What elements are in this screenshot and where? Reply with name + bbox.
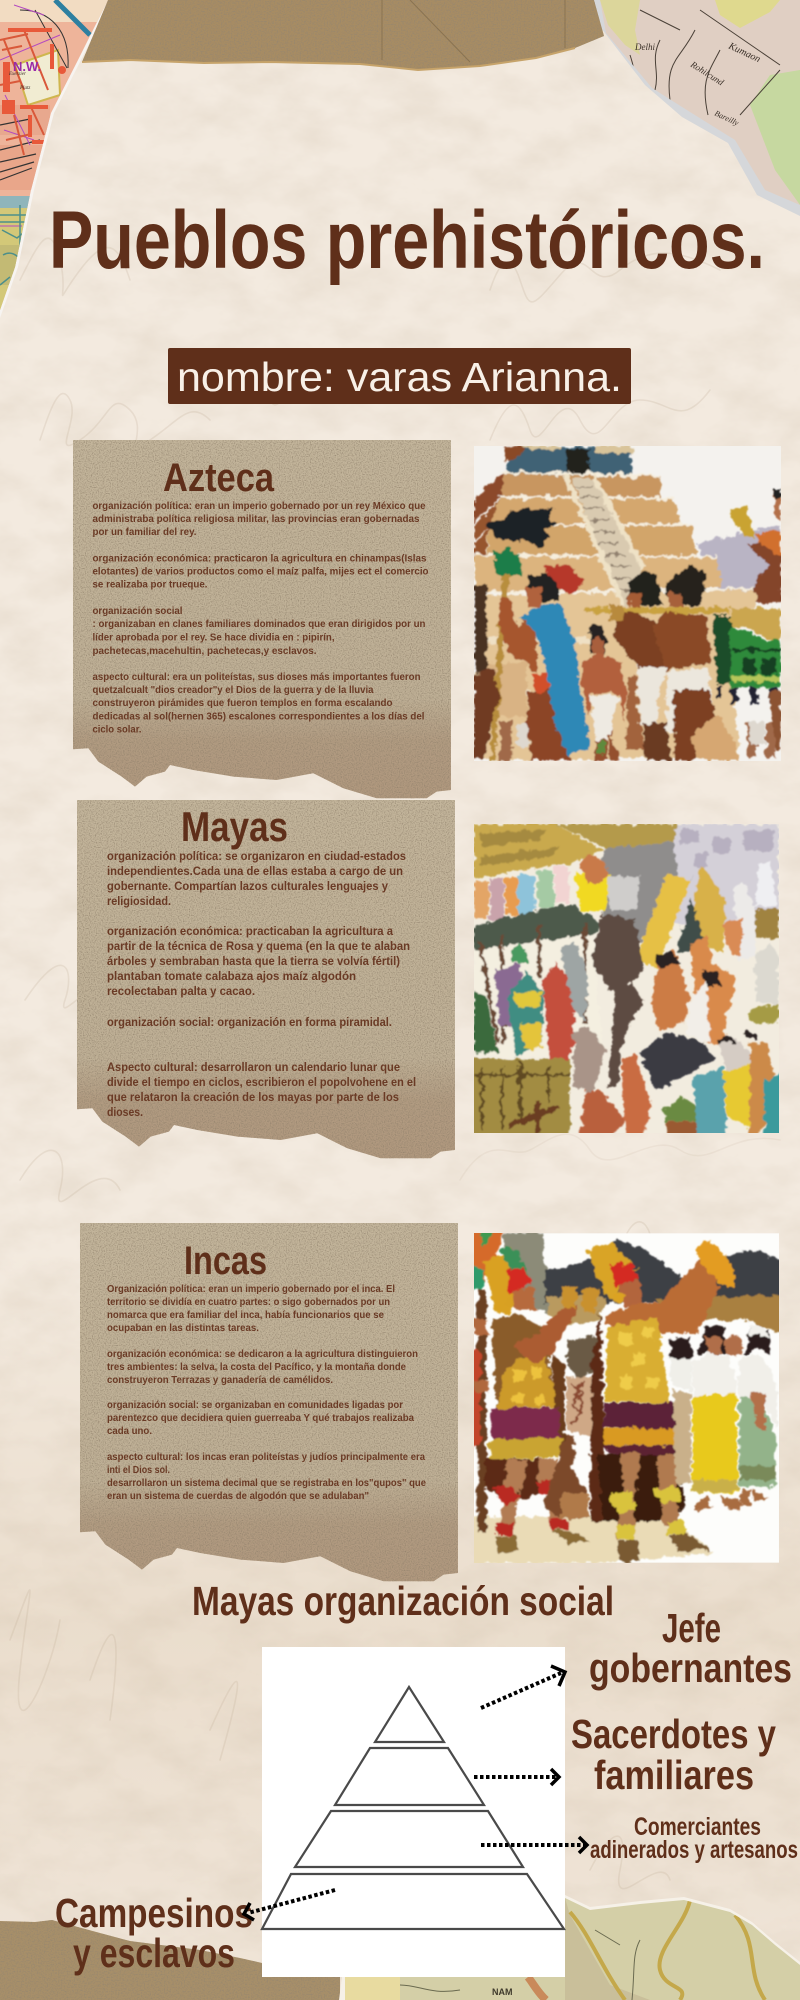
heading: azteca: Azteca: [163, 456, 275, 500]
label: sacerdotes y familiares: [571, 1711, 776, 1798]
text: azteca: [92, 501, 428, 736]
torn map: bottom right: [339, 1890, 800, 2000]
panel: azteca: [73, 440, 451, 798]
text: mayas: religiosidad.: [107, 894, 171, 908]
text: azteca: organización económica: practicaron la agricultura en chinampas(Islas: [92, 554, 427, 564]
text: incas: Organización política: eran un imperio gobernado por el inca. El: [107, 1284, 395, 1295]
arrow: to campesinos: [244, 1890, 335, 1920]
pyramid diagram: [262, 1647, 565, 1977]
panel: mayas: [77, 800, 455, 1158]
torn map: top right: Rohilcund: [688, 59, 726, 88]
text: mayas: divide el tiempo en ciclos, escribieron el popolvohene en el: [107, 1075, 416, 1089]
text: azteca: administraba política religiosa militar, las provincias eran gobernadas: [92, 514, 420, 525]
label: jefe gobernantes: [589, 1605, 792, 1691]
text: mayas: gobernante. Compartían lazos culturales lenguajes y: [107, 879, 388, 893]
label: jefe gobernantes: Jefe: [662, 1605, 721, 1651]
label: campesinos y esclavos: y esclavos: [73, 1930, 235, 1976]
torn map: bottom right: NAM: [492, 1987, 512, 1997]
torn map: top left: [0, 0, 108, 318]
image: inca ceremony: [470, 1230, 783, 1563]
torn map: top left: Platz: [19, 86, 30, 91]
text: mayas: árboles y sembraban hasta que la tierra se volvía fértil): [107, 954, 400, 968]
text: azteca: elotantes) de varios productos como el maíz palfa, mijes ect el comercio: [92, 566, 428, 578]
torn kraft paper: bottom left: [0, 1920, 340, 2000]
text: mayas: organización social: organización en forma piramidal.: [107, 1015, 392, 1029]
text: azteca: : organizaban en clanes familiares dominados que eran dirigidos por un: [92, 619, 426, 630]
text: azteca: dedicadas al sol(hernen 365) escalones correspondientes a los días del: [92, 712, 425, 722]
text: incas: [107, 1284, 426, 1502]
text: azteca: quetzalcualt "dios creador"y el Dios de la guerra y de la lluvia: [92, 685, 374, 696]
text: azteca: aspecto cultural: era un politeístas, sus dioses más importantes fueron: [92, 672, 420, 683]
text: azteca: líder aprobada por el rey. Se hace dividia en : pipirín,: [92, 632, 335, 644]
panel: incas: [80, 1223, 458, 1581]
torn map: top right: Kumaon: [726, 40, 762, 65]
text: incas: ocupaban en las distintas tareas.: [107, 1323, 259, 1334]
text: incas: inti el Dios sol.: [107, 1465, 170, 1476]
text: azteca: construyeron pirámides que fueron templos en forma escalando: [92, 698, 392, 709]
text: incas: eran un sistema de cuerdas de algodón que se adulaban": [107, 1491, 369, 1502]
heading: incas: Incas: [184, 1239, 267, 1283]
torn map: top left: N.W.: [13, 59, 41, 74]
text: mayas: recolectaban palta y cacao.: [107, 984, 255, 998]
image: aztec pyramid procession: [470, 443, 783, 763]
text: mayas: que relataron la creación de los mayas por parte de los: [107, 1090, 399, 1104]
text: incas: cada uno.: [107, 1426, 152, 1437]
text: azteca: pachetecas,macehultin, pachetecas,y esclavos.: [92, 646, 317, 657]
label: campesinos y esclavos: Campesinos: [55, 1890, 253, 1936]
text: mayas: plantaban tomate calabaza ajos maíz algodón: [107, 969, 356, 983]
text: mayas: independientes.Cada una de ellas estaba a cargo de un: [107, 864, 403, 878]
text: mayas: organización económica: practicaban la agricultura a: [107, 924, 393, 938]
text: azteca: organización social: [92, 606, 183, 617]
text: incas: desarrollaron un sistema decimal que se registraba en los"qupos" que: [107, 1478, 426, 1489]
heading: mayas: Mayas: [181, 803, 288, 850]
text: incas: aspecto cultural: los incas eran politeístas y judíos principalmente era: [107, 1452, 425, 1463]
text: mayas: Aspecto cultural: desarrollaron un calendario lunar que: [107, 1060, 400, 1074]
text: incas: construyeron Terrazas y ganadería de camélidos.: [107, 1375, 333, 1386]
name tag: nombre: varas Arianna.: [177, 354, 622, 400]
text: incas: parentezco que decidiera quien guerreaba Y qué trabajos realizaba: [107, 1413, 414, 1424]
torn map: top right: [590, 0, 800, 220]
torn kraft paper strip: top: [82, 0, 604, 70]
torn map: top left: Exerzier: [8, 72, 26, 77]
arrow: to comerciantes: [481, 1837, 587, 1853]
label: comerciantes adinerados y artesanos: Comerciantes: [634, 1813, 761, 1841]
text: azteca: ciclo solar.: [92, 724, 142, 736]
text: azteca: se realizaba por trueque.: [92, 580, 208, 590]
text: incas: territorio se dividía en cuatro partes: o sigo gobernados por un: [107, 1297, 390, 1308]
label: campesinos y esclavos: [55, 1890, 253, 1976]
label: comerciantes adinerados y artesanos: [590, 1813, 798, 1864]
text: incas: organización social: se organizaban en comunidades ligadas por: [107, 1400, 403, 1411]
text: incas: tres ambientes: la selva, la costa del Pacífico, y la montaña donde: [107, 1362, 406, 1373]
label: sacerdotes y familiares: familiares: [594, 1752, 754, 1798]
image: maya market scene: [470, 824, 783, 1138]
arrow: to sacerdotes y familiares: [474, 1769, 559, 1785]
text: mayas: partir de la técnica de Rosa y quema (en la que te alaban: [107, 939, 410, 953]
text: mayas: dioses.: [107, 1105, 143, 1119]
text: incas: nomarca que era familiar del inca, había funcionarios que se: [107, 1310, 384, 1321]
text: incas: organización económica: se dedicaron a la agricultura distinguieron: [107, 1349, 418, 1360]
torn map: top right: Bareilly: [713, 109, 740, 128]
text: azteca: organización política: eran un imperio gobernado por un rey México que: [92, 501, 426, 512]
arrow: to jefe gobernantes: [481, 1666, 565, 1708]
text: azteca: por un familiar del rey.: [92, 527, 197, 538]
text: mayas: [107, 849, 416, 1119]
text: mayas: organización política: se organizaron en ciudad-estados: [107, 849, 406, 863]
torn map: top right: Delhi: [634, 42, 655, 52]
chart heading: mayas organización social: Mayas organización social: [192, 1578, 614, 1624]
